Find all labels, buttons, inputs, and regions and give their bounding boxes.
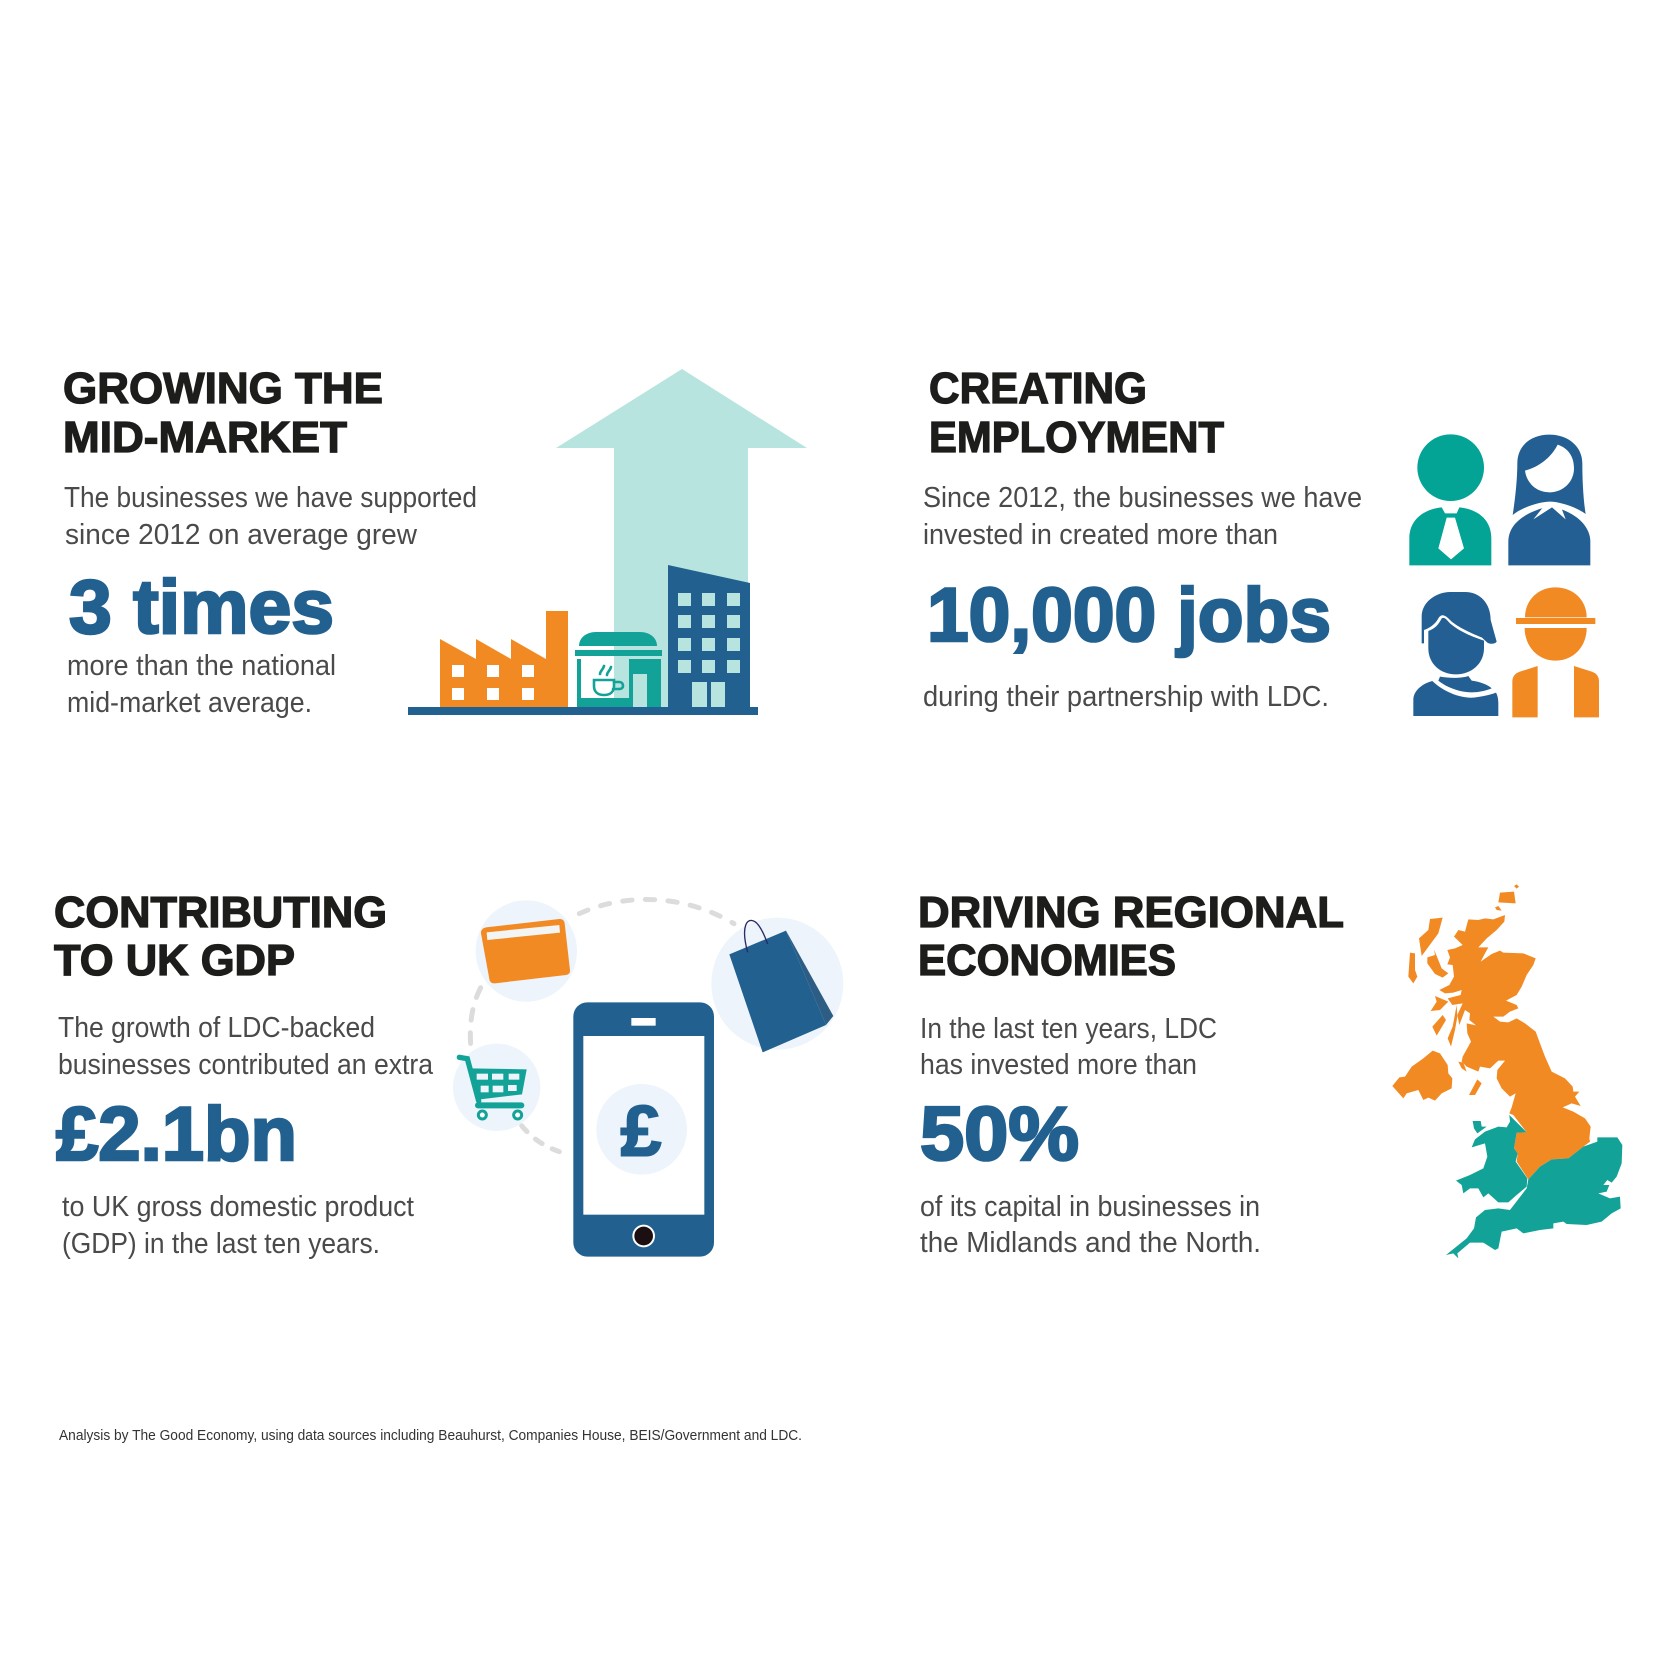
heading: contributing to UK GDP: CONTRIBUTING: [54, 888, 387, 937]
icon: shopping cart: [453, 1044, 540, 1131]
icon: rising arrow: [556, 369, 807, 710]
heading: growing the mid-market: GROWING THE: [63, 364, 383, 413]
text block: GDP intro: businesses contributed an extra: [58, 1049, 434, 1081]
icon: office tower: [668, 565, 750, 707]
heading: driving regional economies: DRIVING REGIONAL: [918, 888, 1344, 937]
heading: contributing to UK GDP: TO UK GDP: [54, 936, 295, 985]
text block: regional intro: has invested more than: [920, 1049, 1197, 1081]
key figure: 2.1bn pounds: £2.1bn: [56, 1092, 297, 1177]
icon: man with short hair: [1413, 592, 1498, 716]
panel: contributing to UK GDP: [54, 888, 843, 1260]
icon group: four people: [1409, 434, 1599, 717]
text block: regional intro: In the last ten years, LDC: [920, 1013, 1217, 1045]
heading: creating employment: EMPLOYMENT: [929, 413, 1224, 462]
ground bar: [408, 707, 758, 715]
heading: contributing to UK GDP: [54, 888, 387, 985]
text block: growth intro: since 2012 on average grew: [65, 519, 418, 551]
map region: Wales and the South: [1446, 1115, 1622, 1258]
icon: factory: [440, 611, 568, 707]
text block: regional intro: [920, 1013, 1217, 1081]
text block: employment intro: [923, 482, 1362, 551]
text block: employment intro: invested in created more than: [923, 519, 1278, 551]
text block: regional conclusion: [920, 1191, 1261, 1259]
panel: growing the mid-market: [63, 364, 807, 719]
icon: worker in hard hat: [1512, 587, 1599, 717]
text block: growth conclusion: mid-market average.: [67, 687, 312, 719]
text block: employment conclusion: during their partnership with LDC.: [923, 681, 1329, 713]
map region: Scotland, Northern Ireland and the North: [1392, 884, 1591, 1179]
icon: smartphone: [573, 1002, 714, 1257]
heading: growing the mid-market: MID-MARKET: [63, 413, 347, 462]
text block: GDP conclusion: to UK gross domestic product: [62, 1191, 414, 1223]
illustration: phone and shopping icons: [453, 899, 843, 1257]
text block: employment intro: Since 2012, the businesses we have: [923, 482, 1362, 514]
text block: growth intro: [64, 482, 477, 551]
map: United Kingdom regions: [1392, 884, 1622, 1258]
text block: GDP intro: [58, 1012, 434, 1081]
heading: driving regional economies: ECONOMIES: [918, 936, 1176, 985]
icon: smartphone: £: [621, 1092, 661, 1172]
key figure: 10,000 jobs: 10,000 jobs: [927, 573, 1331, 658]
icon: credit card: [476, 900, 577, 1002]
heading: driving regional economies: [918, 888, 1344, 985]
text block: growth intro: The businesses we have supported: [64, 482, 477, 514]
panel: driving regional economies: [918, 884, 1622, 1259]
text block: regional conclusion: the Midlands and the North.: [920, 1227, 1261, 1259]
footnote: data sources: Analysis by The Good Economy, using data sources including Beauhurst, Companies House, BEIS/Government and LDC.: [59, 1428, 802, 1444]
icon: shopping bag: [711, 918, 843, 1052]
heading: growing the mid-market: [63, 364, 383, 462]
text block: GDP intro: The growth of LDC-backed: [58, 1012, 375, 1044]
heading: creating employment: CREATING: [929, 364, 1147, 413]
icon: man with tie: [1409, 434, 1491, 565]
key figure: 3 times: 3 times: [69, 565, 334, 650]
icon: woman: [1508, 435, 1590, 565]
text block: GDP conclusion: [62, 1191, 414, 1260]
text block: growth conclusion: more than the national: [67, 650, 336, 682]
key figure: 50 percent: 50%: [920, 1092, 1079, 1177]
heading: creating employment: [929, 364, 1224, 462]
text block: regional conclusion: of its capital in businesses in: [920, 1191, 1260, 1223]
text block: GDP conclusion: (GDP) in the last ten years.: [62, 1228, 380, 1260]
dashed connector arcs: [470, 899, 734, 1152]
text block: growth conclusion: [67, 650, 336, 719]
panel: creating employment: [923, 364, 1599, 717]
icon: coffee shop: [575, 632, 662, 707]
